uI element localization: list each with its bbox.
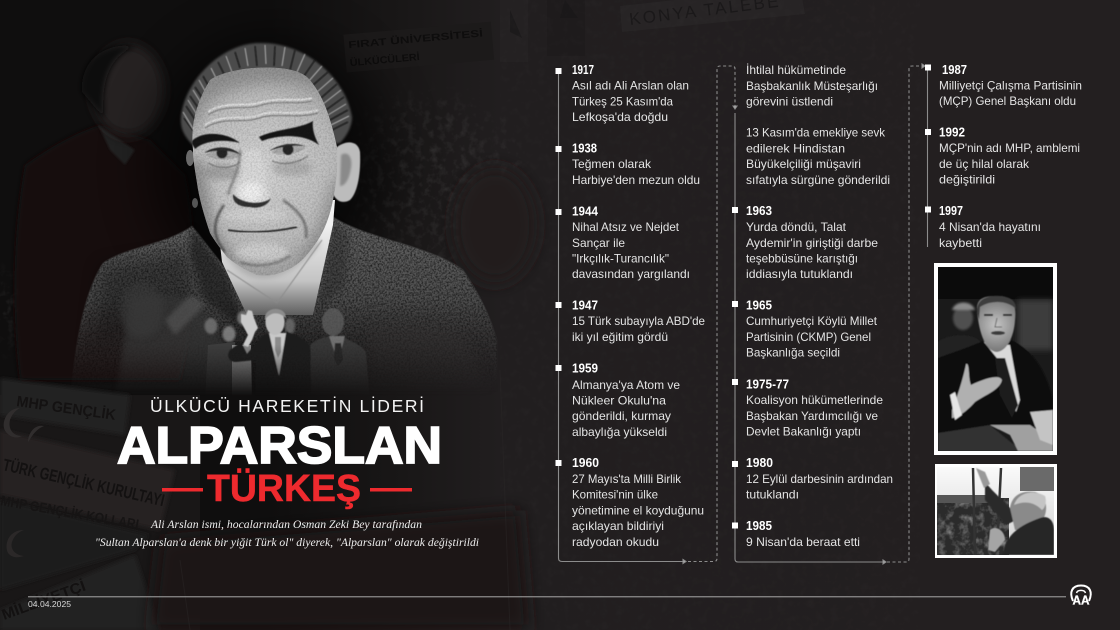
item 1917: Lefkoşa'da doğdu <box>572 111 668 124</box>
newspaper bottom left: MHP GENÇLİK KOLLARI <box>0 492 140 532</box>
item 1987 <box>925 63 1082 108</box>
jacket <box>74 217 497 372</box>
newspaper bottom left: MİLLİYETÇİ <box>0 578 88 624</box>
item 1917 <box>556 63 689 124</box>
newspaper bottom left: TÜRK GENÇLİK KURULTAYI <box>1 455 166 510</box>
head <box>977 296 1015 352</box>
item 1992: de üç hilal olarak <box>939 158 1029 171</box>
item 1975-77 <box>732 378 883 438</box>
item 13 Kasım <box>746 126 890 187</box>
item 1947 <box>556 298 705 344</box>
item 1980 <box>732 456 893 502</box>
item 1965 <box>732 298 878 360</box>
item 1997: 4 Nisan'da hayatını <box>939 221 1041 234</box>
banner: Fırat Üniversitesi Ülkücüleri: ÜLKÜCÜLERİ <box>349 50 420 69</box>
item 13 Kasım: 13 Kasım'da emekliye sevk <box>746 126 885 140</box>
newspaper bottom left: MHP GENÇLİK <box>15 393 117 424</box>
item 1975-77: 1975-77 <box>746 378 789 392</box>
newspaper bottom left <box>0 378 200 630</box>
item 1965: Partisinin (CKMP) Genel <box>746 331 871 344</box>
item 1960: radyodan okudu <box>572 536 659 549</box>
item 1959: Almanya'ya Atom ve <box>572 379 680 392</box>
onlookers left <box>204 318 218 334</box>
item 1965: 1965 <box>746 298 772 312</box>
item 1997 <box>925 204 1041 250</box>
nose <box>228 150 271 208</box>
background soldier <box>953 306 973 330</box>
item 1985 <box>732 519 860 549</box>
item 1997: 1997 <box>939 204 963 218</box>
intro note: "Sultan Alparslan'a denk bir yiğit Türk ol" diyerek, "Alparslan" olarak değiştirildi <box>95 535 479 549</box>
background crowd <box>3 103 498 331</box>
heading block <box>117 396 442 510</box>
item 1959: Nükleer Okulu'na <box>572 394 667 408</box>
item 1960 continued: Başbakanlık Müsteşarlığı <box>746 80 878 93</box>
item 1975-77: Başbakan Yardımcılığı ve <box>746 410 878 423</box>
item 1947: 1947 <box>572 298 598 312</box>
item 1944: Sançar ile <box>572 237 625 250</box>
item 1960 continued: İhtilal hükümetinde <box>746 64 846 77</box>
item 1992: değiştirildi <box>939 174 995 186</box>
right mass <box>378 334 431 350</box>
red rule right <box>370 488 412 492</box>
suit <box>938 340 1053 435</box>
name: Türkeş: TÜRKEŞ <box>207 467 361 510</box>
item 1938: Harbiye'den mezun oldu <box>572 174 700 187</box>
item 1980: 1980 <box>746 456 773 470</box>
item 1980: 12 Eylül darbesinin ardından <box>746 473 893 486</box>
ghost speaker at left <box>15 44 194 380</box>
item 1944: 1944 <box>572 204 598 218</box>
item 1938: 1938 <box>572 142 597 156</box>
item 1960 continued: görevini üstlendi <box>746 96 833 108</box>
glasses man <box>310 308 368 383</box>
item 1985: 1985 <box>746 519 772 533</box>
item 1960 continued <box>746 64 878 108</box>
logo: AA: AA <box>1072 594 1090 608</box>
item 1938 <box>556 142 700 187</box>
item 1959: 1959 <box>572 362 598 376</box>
photo: speech at lectern <box>934 263 1057 455</box>
item 1947: iki yıl eğitim gördü <box>572 331 668 344</box>
ear right <box>332 142 360 202</box>
forehead wrinkles <box>205 98 318 128</box>
item 1960: Komitesi'nin ülke <box>572 488 658 502</box>
item 1959 <box>556 362 680 439</box>
item 1963: iddiasıyla tutuklandı <box>746 268 853 281</box>
item 1992: 1992 <box>939 126 965 140</box>
posters top <box>500 0 585 62</box>
footer rule <box>28 596 1066 597</box>
item 1963: 1963 <box>746 204 772 218</box>
halo shadow <box>150 35 390 295</box>
background photo collage <box>0 0 778 630</box>
timeline column 1 <box>556 63 705 549</box>
timeline column 3 <box>925 63 1082 250</box>
item 1959: gönderildi, kurmay <box>572 410 671 423</box>
main portrait <box>74 42 497 372</box>
item 1992 <box>925 126 1080 186</box>
kicker: ÜLKÜCÜ HAREKETİN LİDERİ <box>150 396 424 416</box>
item 1917: 1917 <box>572 63 594 77</box>
small figure <box>228 308 311 376</box>
shading <box>193 68 336 264</box>
name: Alparslan: ALPARSLAN <box>117 417 442 475</box>
item 1959: albaylığa yükseldi <box>572 426 667 439</box>
item 13 Kasım: Büyükelçiliği müşaviri <box>746 158 861 171</box>
hair <box>181 43 352 150</box>
date: 04.04.2025 <box>28 599 71 609</box>
item 1965: Cumhuriyetçi Köylü Millet <box>746 315 878 328</box>
item 1963: Yurda döndü, Talat <box>746 221 847 234</box>
face <box>192 68 337 276</box>
intro note <box>95 517 479 549</box>
crowd with small figure <box>121 284 431 392</box>
item 1938: Teğmen olarak <box>572 158 651 171</box>
lectern <box>938 425 1018 451</box>
logo: AA <box>1071 586 1091 608</box>
item 1987: (MÇP) Genel Başkanı oldu <box>939 95 1076 108</box>
man greeting <box>976 468 1054 555</box>
collar and shirt <box>215 200 335 315</box>
photo: greeting crowd <box>935 464 1057 558</box>
item 1997: kaybetti <box>939 237 982 250</box>
newspaper bottom centre <box>150 370 530 630</box>
item 1947: 15 Türk subayıyla ABD'de <box>572 315 705 328</box>
timeline column 2 <box>732 64 893 549</box>
item 1917: Asıl adı Ali Arslan olan <box>572 80 689 92</box>
item 1975-77: Koalisyon hükümetlerinde <box>746 394 883 407</box>
ear left <box>186 150 198 208</box>
item 1944: davasından yargılandı <box>572 268 690 281</box>
item 1975-77: Devlet Bakanlığı yaptı <box>746 426 861 438</box>
item 1960: yönetimine el koyduğunu <box>572 504 704 518</box>
item 1965: Başkanlığa seçildi <box>746 346 840 360</box>
item 1960: 1960 <box>572 456 599 470</box>
item 1944: "Irkçılık-Turancılık" <box>572 252 669 266</box>
item 1980: tutuklandı <box>746 488 799 502</box>
item 1960: 27 Mayıs'ta Milli Birlik <box>572 473 681 486</box>
eyes <box>204 144 308 167</box>
ghost face right <box>453 167 537 283</box>
mouth <box>228 227 297 232</box>
item 1987: Milliyetçi Çalışma Partisinin <box>939 80 1082 92</box>
red rule left <box>162 488 203 492</box>
item 1917: Türkeş 25 Kasım'da <box>572 96 673 108</box>
cheek folds <box>215 205 225 252</box>
item 1944 <box>556 204 690 281</box>
item 1985: 9 Nisan'da beraat etti <box>746 536 860 549</box>
brows <box>191 121 319 149</box>
item 1960 <box>556 456 704 549</box>
item 1987: 1987 <box>942 63 967 77</box>
item 1963 <box>732 204 878 281</box>
item 1960: açıklayan bildiriyi <box>572 520 664 533</box>
item 1963: teşebbüsüne karıştığı <box>746 252 858 266</box>
item 13 Kasım: sıfatıyla sürgüne gönderildi <box>746 174 890 187</box>
banner: Fırat Üniversitesi Ülkücüleri: FIRAT ÜNİVERSİTESİ <box>348 26 484 51</box>
crowd mass <box>121 284 431 392</box>
item 1963: Aydemir'in giriştiği darbe <box>746 237 878 250</box>
timeline connectors <box>558 64 928 564</box>
banner: Fırat Üniversitesi Ülkücüleri <box>343 22 494 72</box>
item 13 Kasım: edilerek Hindistan <box>746 142 845 156</box>
item 1944: Nihal Atsız ve Nejdet <box>572 221 680 234</box>
hand <box>952 364 1002 418</box>
item 1992: MÇP'nin adı MHP, amblemi <box>939 142 1080 155</box>
intro note: Ali Arslan ismi, hocalarından Osman Zeki Bey tarafından <box>150 517 422 531</box>
